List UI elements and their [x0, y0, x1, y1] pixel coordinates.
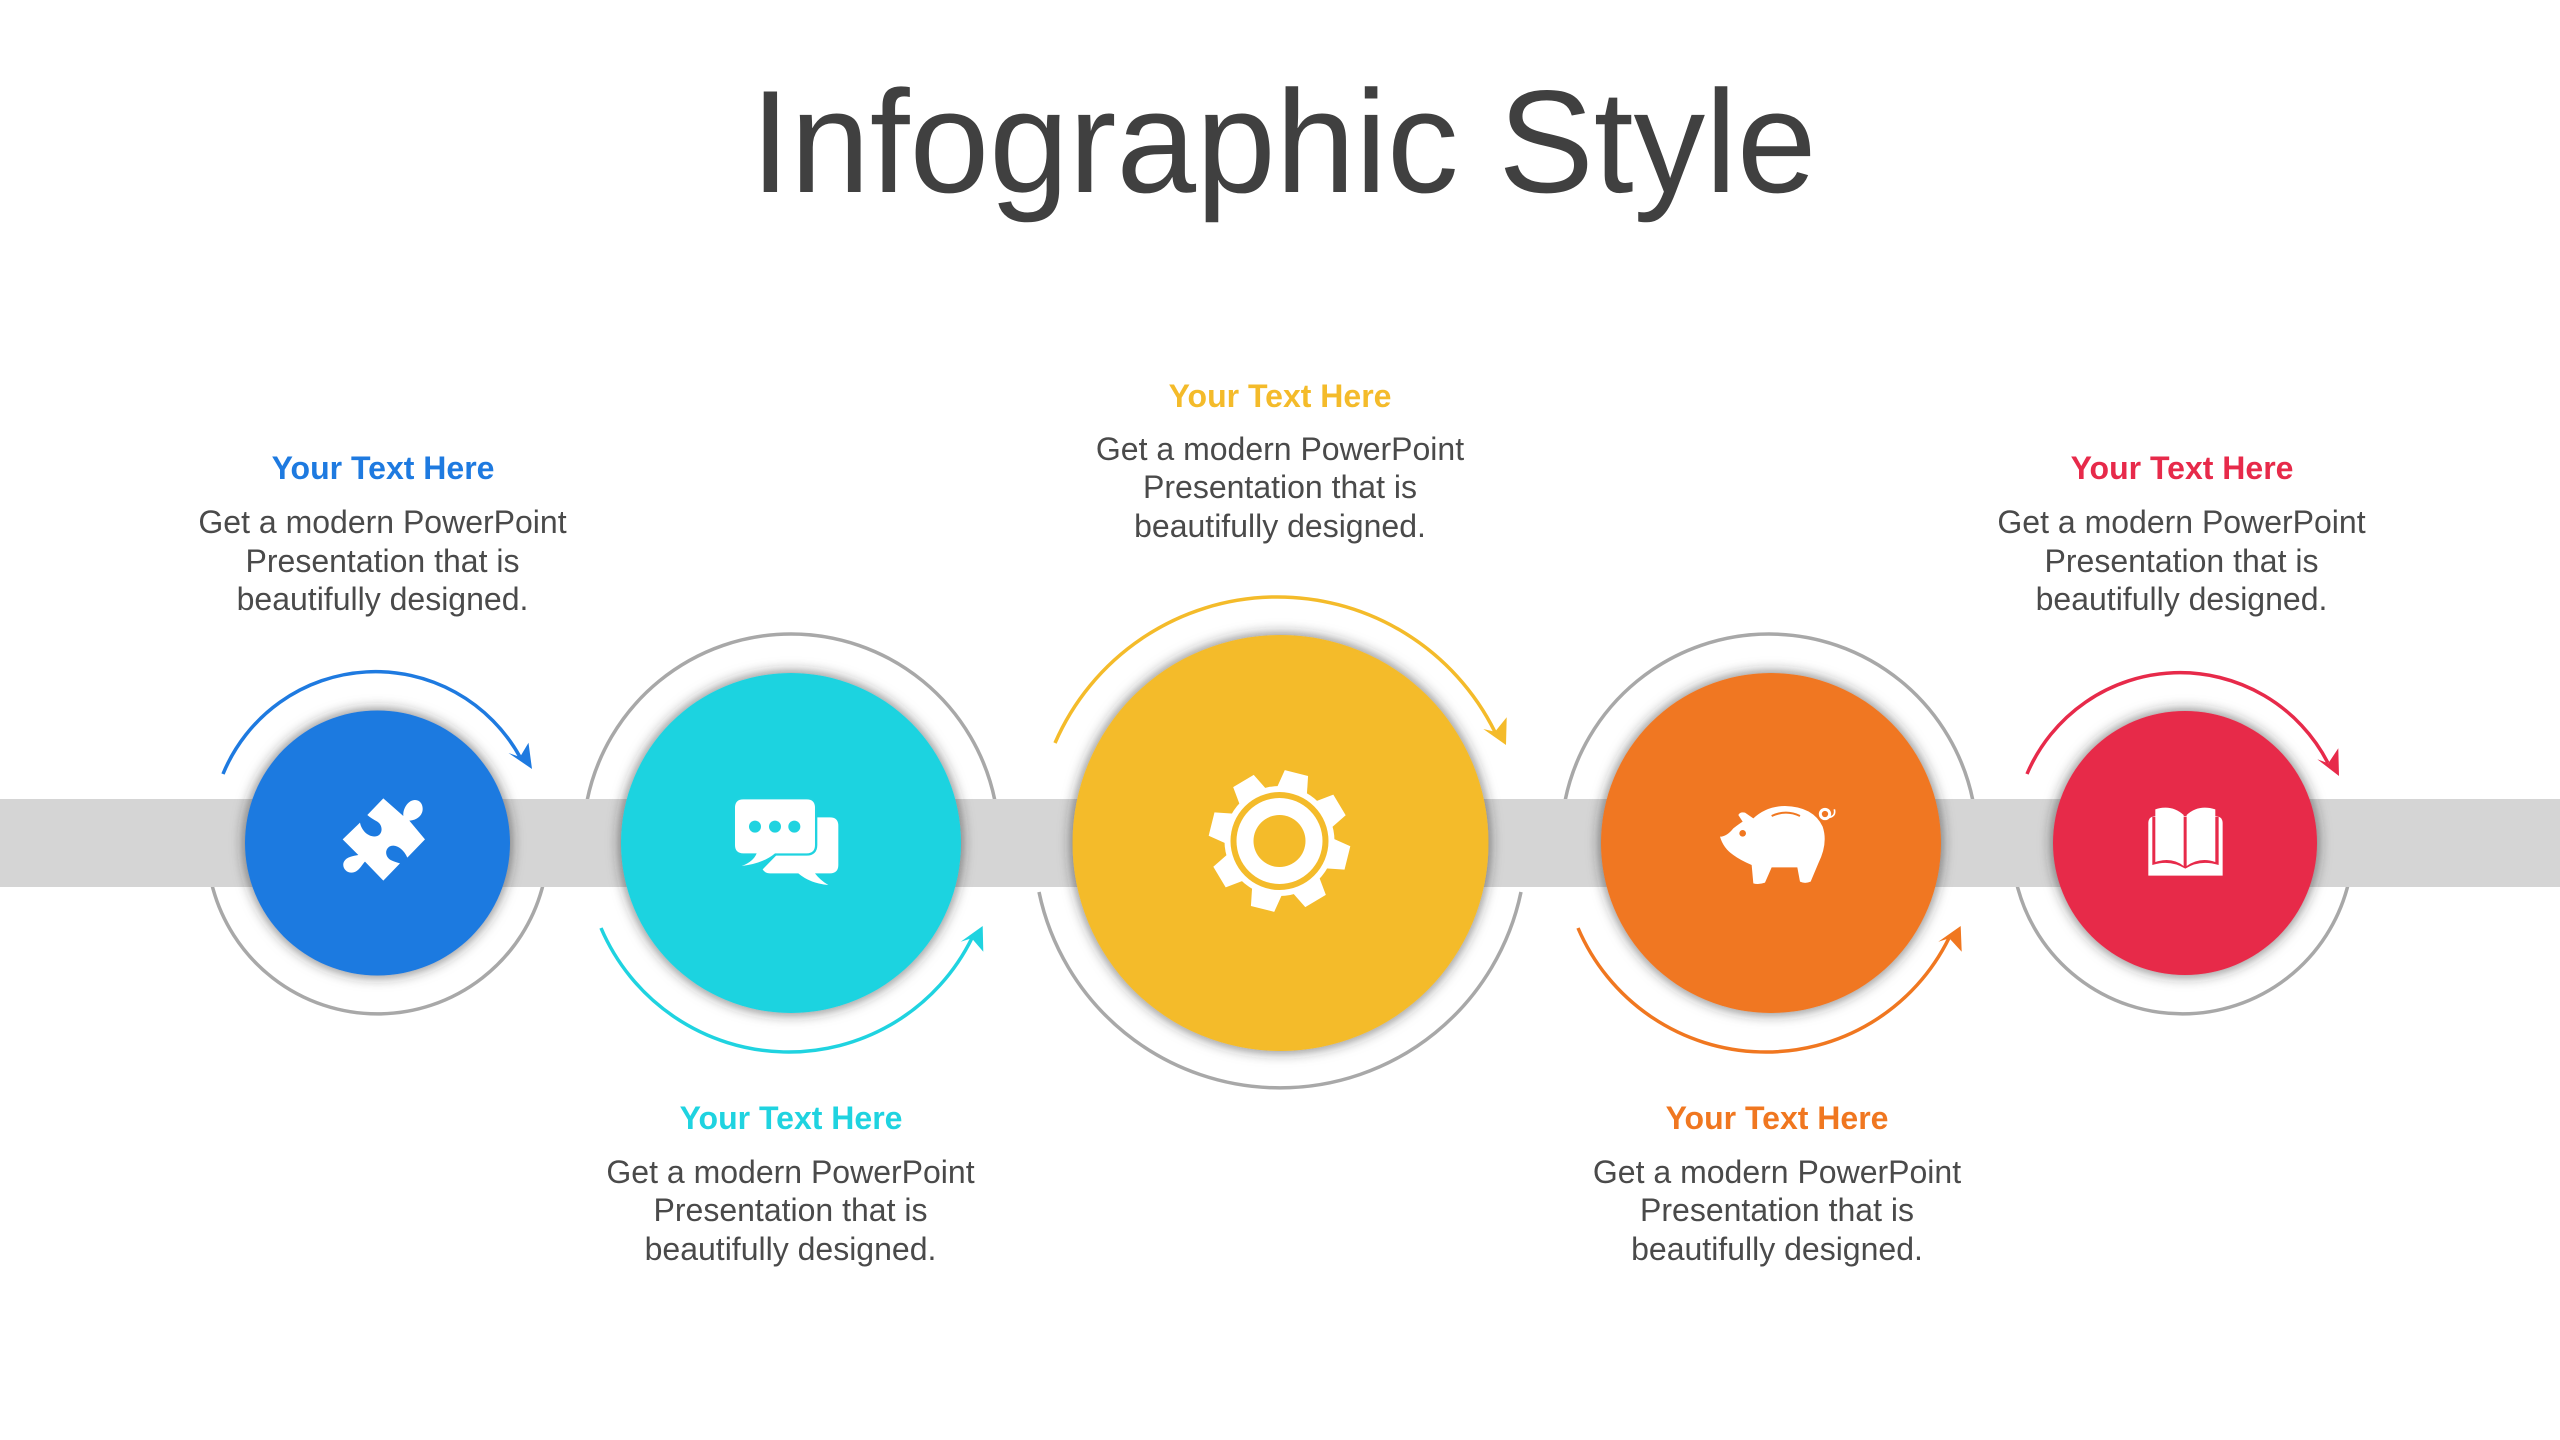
heading 4: Your Text Here — [1666, 1100, 1888, 1136]
step 3: gear — [1055, 597, 1507, 1051]
arrow 3 — [1055, 597, 1507, 745]
body 2: Get a modern PowerPoint — [606, 1154, 975, 1190]
body 5: Get a modern PowerPoint — [1997, 504, 2366, 540]
step 1: puzzle — [223, 672, 532, 976]
body 3: Presentation that is — [1143, 469, 1417, 505]
body 1: beautifully designed. — [237, 581, 528, 617]
text block 3 — [1096, 378, 1464, 544]
text block 2 — [606, 1100, 975, 1267]
arrow 1 — [223, 672, 532, 774]
step 2: chat — [601, 673, 983, 1052]
icon: open book — [2148, 808, 2223, 876]
step 5: book — [2027, 673, 2339, 975]
horizontal band — [0, 799, 2560, 887]
body 4: beautifully designed. — [1631, 1231, 1923, 1267]
body 2: beautifully designed. — [645, 1231, 936, 1267]
icon: chat bubbles — [735, 799, 838, 885]
heading 2: Your Text Here — [680, 1100, 902, 1136]
circle 1 — [245, 710, 510, 976]
text block 5 — [1997, 450, 2366, 617]
circle 2 — [621, 673, 961, 1013]
icon: puzzle piece — [343, 798, 425, 881]
arrow 4 — [1578, 926, 1962, 1052]
body 1: Presentation that is — [246, 543, 519, 579]
body 5: Presentation that is — [2045, 543, 2318, 579]
step 4: piggy bank — [1578, 673, 1962, 1052]
text block 4 — [1593, 1100, 1961, 1267]
body 3: Get a modern PowerPoint — [1096, 431, 1464, 467]
gray track arcs — [212, 634, 2348, 1088]
body 2: Presentation that is — [654, 1192, 927, 1228]
icon: piggy bank — [1720, 806, 1835, 884]
body 1: Get a modern PowerPoint — [198, 504, 567, 540]
heading 1: Your Text Here — [272, 450, 494, 486]
body 4: Presentation that is — [1640, 1192, 1914, 1228]
body 3: beautifully designed. — [1134, 508, 1426, 544]
arrow 2 — [601, 926, 983, 1052]
title: Infographic Style — [750, 60, 1816, 223]
text block 1 — [198, 450, 567, 617]
heading 3: Your Text Here — [1169, 378, 1391, 414]
circle 5 — [2053, 711, 2317, 975]
circle 4 — [1601, 673, 1941, 1013]
circle 3 — [1072, 635, 1488, 1051]
body 5: beautifully designed. — [2036, 581, 2327, 617]
arrow 5 — [2027, 673, 2339, 776]
body 4: Get a modern PowerPoint — [1593, 1154, 1961, 1190]
icon: gear — [1208, 769, 1351, 913]
heading 5: Your Text Here — [2071, 450, 2293, 486]
